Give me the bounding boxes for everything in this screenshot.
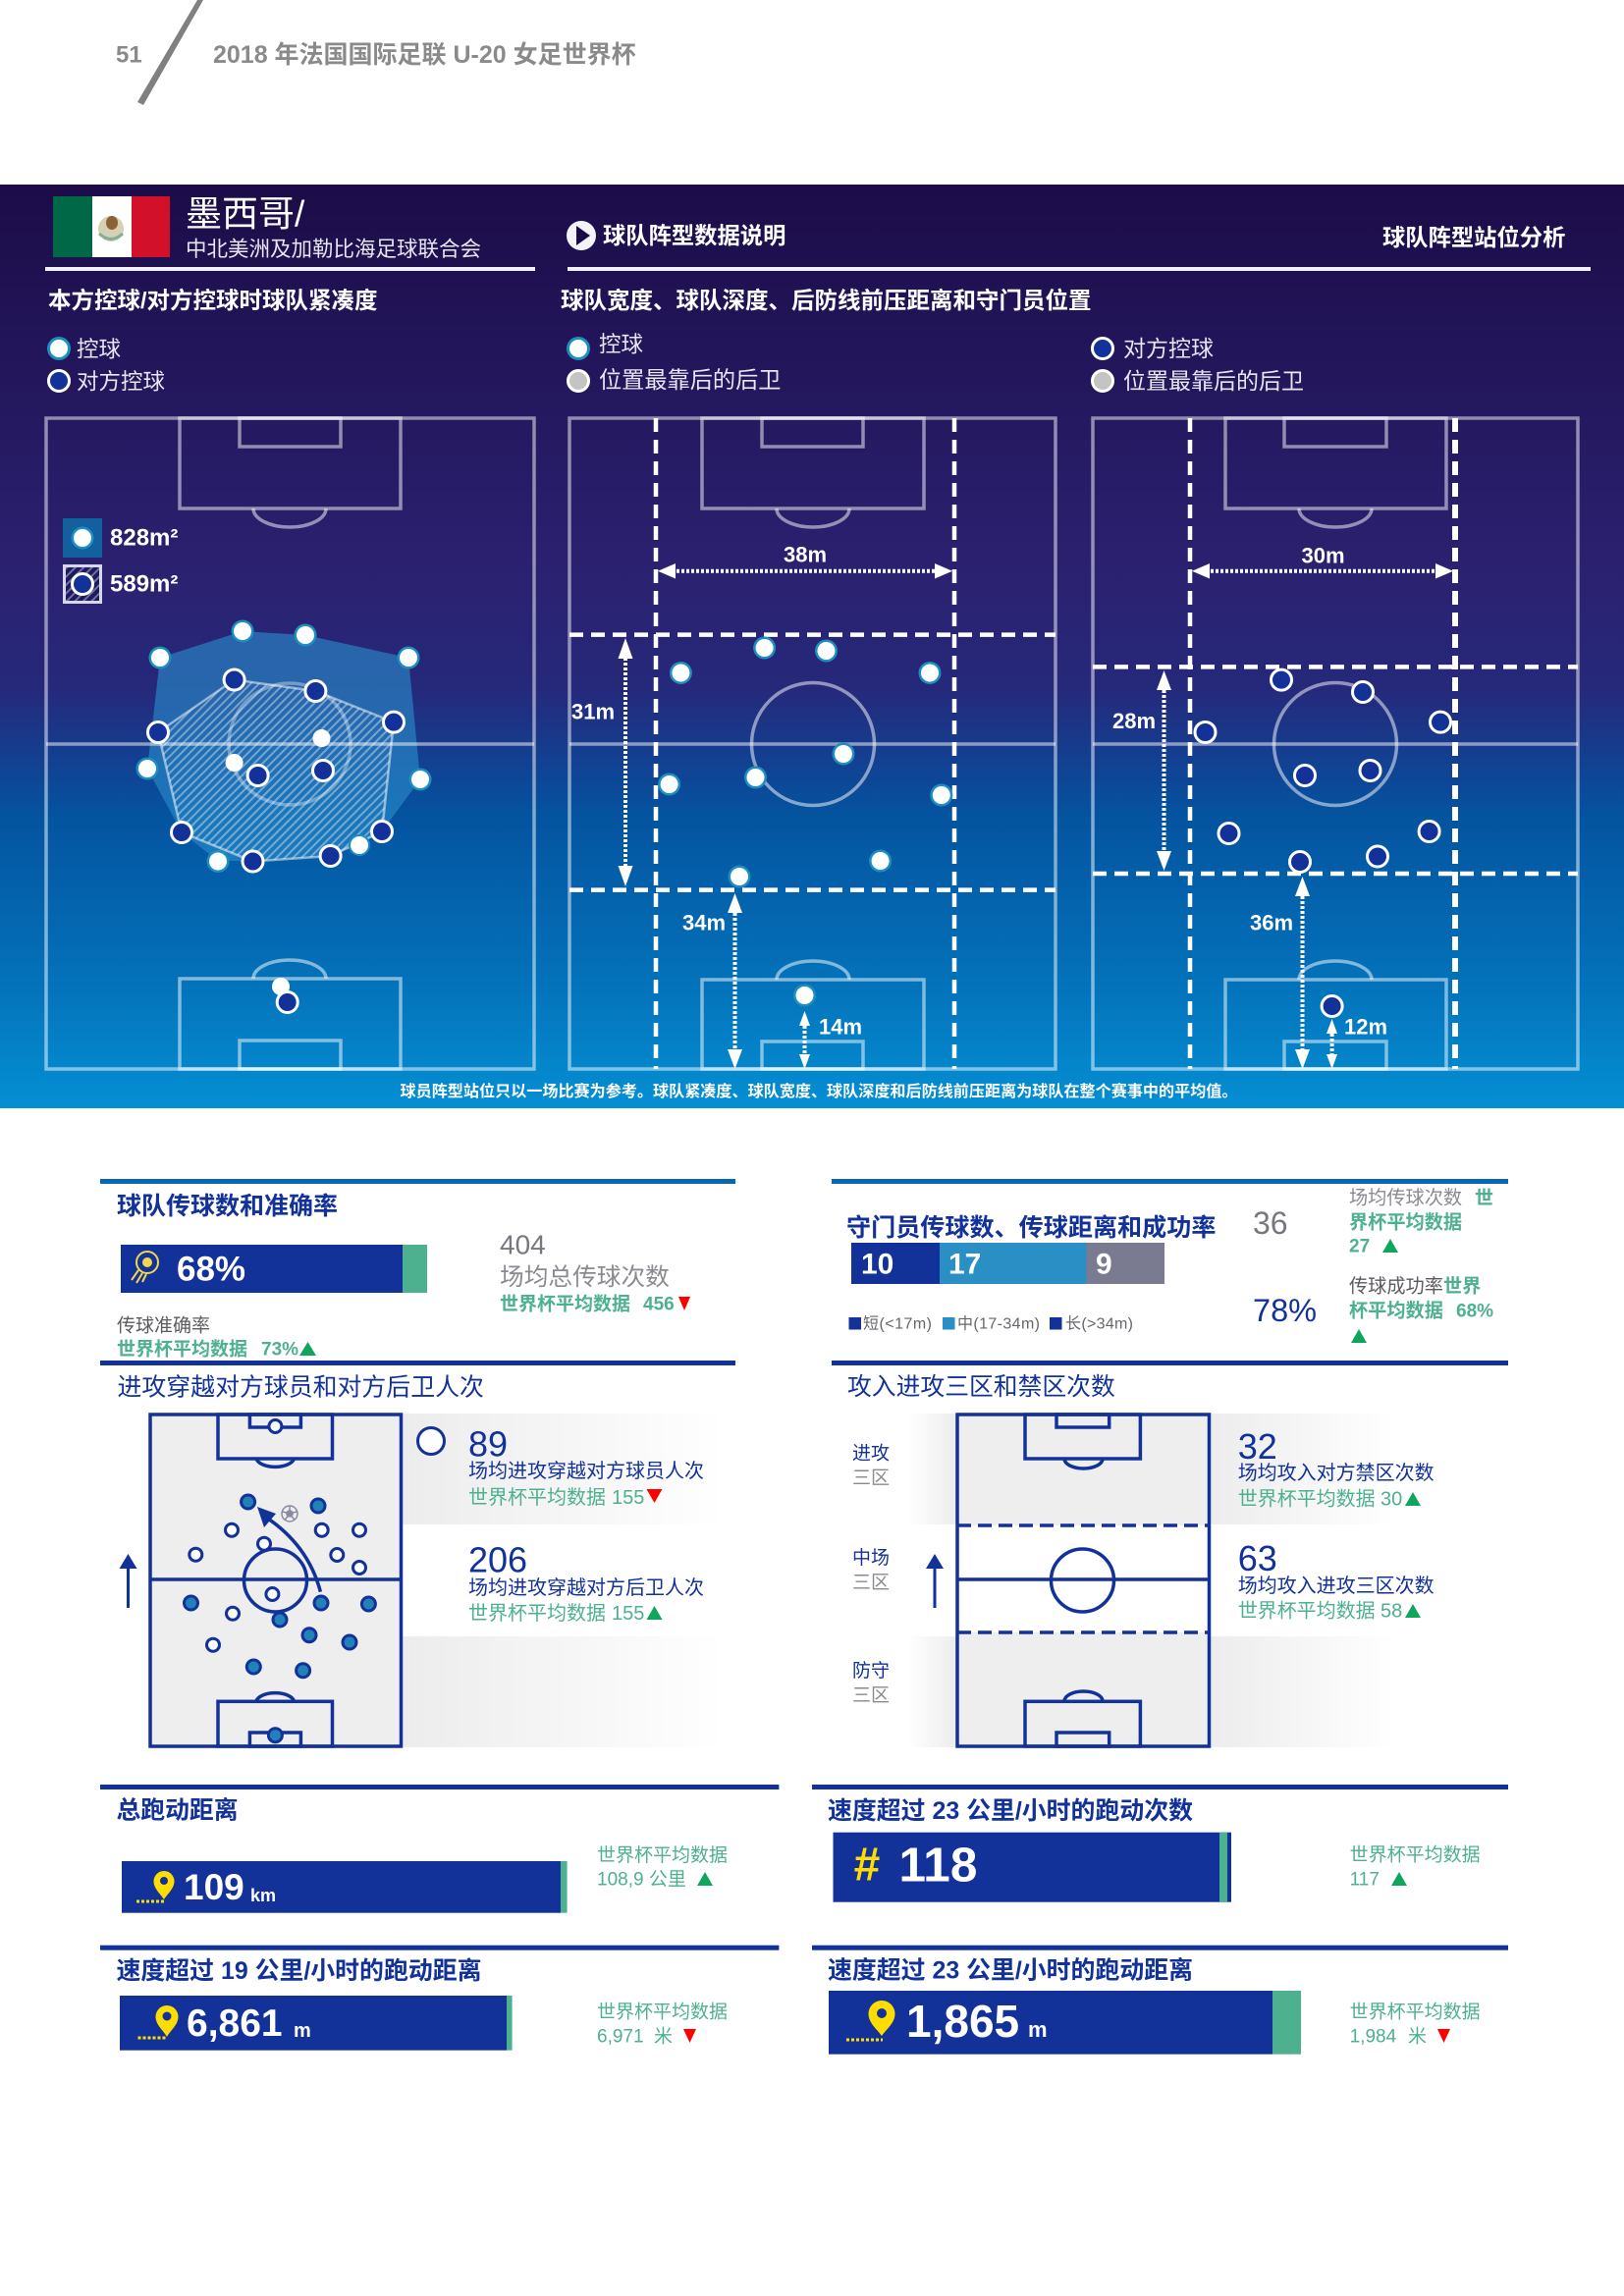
dashed limits bbox=[569, 418, 1056, 1069]
world cup average passes: 世界杯平均数据 bbox=[500, 1294, 630, 1315]
bar bbox=[829, 1991, 1301, 2055]
icon: Mexico flag bbox=[53, 196, 170, 257]
area legend: 589m² bbox=[110, 571, 178, 597]
panel: goalkeeper passes: 场均传球次数 bbox=[1349, 1188, 1462, 1209]
stat: players passed: 155 bbox=[612, 1487, 644, 1509]
world cup average: 米 bbox=[1408, 2026, 1427, 2048]
heading: 总跑动距离 bbox=[116, 1796, 238, 1824]
legend: out of possession: 位置最靠后的后卫 bbox=[1123, 368, 1304, 394]
area legend bbox=[63, 518, 178, 603]
world cup average bbox=[597, 1844, 728, 1891]
bar bbox=[120, 1996, 513, 2051]
icon: location pin bbox=[136, 1871, 175, 1901]
arrow: depth 31m bbox=[571, 638, 632, 886]
stat: final third entries: 世界杯平均数据 bbox=[1238, 1600, 1376, 1623]
defending team players bbox=[189, 1419, 365, 1651]
stacked bar bbox=[851, 1243, 1164, 1284]
panel: attacking line breaks bbox=[118, 1374, 725, 1747]
world cup average: 世界杯平均数据 bbox=[597, 1844, 728, 1866]
pitch bbox=[150, 1415, 401, 1746]
pitch lines bbox=[1093, 418, 1578, 1069]
heading: 进攻穿越对方球员和对方后卫人次 bbox=[118, 1374, 484, 1402]
arrow: goalkeeper 12m bbox=[1326, 1015, 1387, 1069]
panel: goalkeeper passes bbox=[832, 1179, 1508, 1343]
heading: formation analysis: 球队阵型站位分析 bbox=[1382, 224, 1565, 250]
pitch lines bbox=[569, 418, 1056, 1069]
stat: players passed bbox=[468, 1423, 704, 1509]
panel: team formation background bbox=[0, 185, 1624, 1108]
heading: formation data: 球队阵型数据说明 bbox=[603, 223, 785, 248]
arrow: defensive line 34m bbox=[682, 893, 742, 1069]
panel: goalkeeper passes: 传球成功率 bbox=[1349, 1276, 1443, 1298]
area legend: 828m² bbox=[110, 524, 178, 552]
page number: 51 bbox=[116, 41, 142, 69]
page title: 2018 年法国国际足联 U-20 女足世界杯 bbox=[213, 41, 636, 69]
arrow: width 38m bbox=[658, 542, 952, 579]
arrow: pass path bbox=[257, 1507, 320, 1592]
zone labels bbox=[852, 1443, 890, 1706]
value bbox=[854, 1838, 977, 1893]
bar bbox=[122, 1861, 568, 1913]
stat: players passed: 场均进攻穿越对方球员人次 bbox=[468, 1460, 704, 1482]
heading: 守门员传球数、传球距离和成功率 bbox=[846, 1214, 1216, 1242]
stat: defenders passed: 155 bbox=[612, 1603, 644, 1625]
legend: out of possession: 对方控球 bbox=[1123, 336, 1214, 361]
icon: play bbox=[567, 221, 596, 250]
panel: goalkeeper passes: 27 bbox=[1349, 1237, 1370, 1256]
legend: compactness bbox=[47, 337, 165, 395]
stat: final third entries bbox=[1238, 1538, 1435, 1623]
stat: players passed: 89 bbox=[468, 1423, 508, 1465]
stat: final third entries: 场均攻入进攻三区次数 bbox=[1238, 1575, 1435, 1597]
pitch bbox=[957, 1415, 1210, 1746]
players out of possession bbox=[147, 669, 405, 1013]
stat: box entries: 32 bbox=[1238, 1426, 1277, 1467]
panel: distance above 23 km/h bbox=[812, 1946, 1508, 2055]
panel: team passes and accuracy bbox=[100, 1179, 735, 1361]
passes per game: 36 bbox=[1253, 1205, 1288, 1241]
world cup average bbox=[597, 2001, 728, 2048]
zone labels: 进攻 bbox=[852, 1443, 890, 1465]
stat: defenders passed: 世界杯平均数据 bbox=[468, 1602, 606, 1625]
background bands bbox=[401, 1414, 725, 1747]
stat: box entries: 世界杯平均数据 bbox=[1238, 1488, 1376, 1511]
attacking team players bbox=[185, 1495, 375, 1742]
legend: compactness: 控球 bbox=[77, 338, 121, 361]
players bbox=[658, 636, 952, 1007]
world cup average: 117 bbox=[1350, 1869, 1380, 1891]
world cup average passes: 456 bbox=[643, 1294, 675, 1315]
arrow: attack direction bbox=[926, 1554, 944, 1608]
world cup average: 米 bbox=[654, 2026, 673, 2048]
legend: in possession bbox=[567, 332, 782, 393]
header rule left bbox=[45, 267, 535, 271]
pitch lines bbox=[46, 418, 534, 1069]
value bbox=[184, 1867, 276, 1907]
stat: final third entries: 63 bbox=[1238, 1538, 1277, 1578]
stat: box entries bbox=[1238, 1426, 1435, 1511]
arrow: defensive line 34m: 34m bbox=[682, 911, 726, 934]
value: m bbox=[1028, 2017, 1048, 2042]
distance legend: 短(<17m) bbox=[863, 1315, 932, 1333]
header rule right bbox=[568, 267, 1591, 271]
background bands bbox=[908, 1414, 1395, 1747]
footnote: 球员阵型站位只以一场比赛为参考。球队紧凑度、球队宽度、球队深度和后防线前压距离为球队在整个赛事中的平均值。 bbox=[401, 1082, 1237, 1100]
compactness area polygon out of possession bbox=[158, 679, 394, 862]
compactness area polygon in possession bbox=[147, 631, 420, 861]
stacked bar: 9 bbox=[1096, 1249, 1112, 1280]
world cup average bbox=[1350, 1843, 1481, 1891]
bar bbox=[833, 1833, 1231, 1902]
arrow: depth 28m bbox=[1112, 670, 1171, 871]
stacked bar: 17 bbox=[948, 1249, 981, 1280]
icon: location pin bbox=[137, 2005, 179, 2038]
icon: location pin bbox=[846, 2001, 895, 2040]
value: 118 bbox=[899, 1838, 977, 1893]
arrow: goalkeeper 14m: 14m bbox=[819, 1015, 862, 1039]
panel: total distance bbox=[100, 1785, 779, 1913]
players bbox=[1195, 669, 1451, 1017]
value: m bbox=[294, 2020, 311, 2042]
arrow: depth 28m: 28m bbox=[1112, 709, 1156, 733]
value: 109 bbox=[184, 1867, 244, 1907]
legend: out of possession bbox=[1092, 336, 1304, 394]
world cup average: 6,971 bbox=[597, 2026, 644, 2048]
heading: 速度超过 19 公里/小时的跑动距离 bbox=[116, 1957, 482, 1985]
header slash bbox=[137, 0, 203, 105]
world cup average: 世界杯平均数据 bbox=[1350, 1843, 1481, 1865]
panel: goalkeeper passes: 68% bbox=[1456, 1302, 1493, 1321]
icon: ball bbox=[132, 1252, 158, 1283]
total passes: 404 bbox=[500, 1229, 546, 1260]
zone labels: 中场 bbox=[852, 1547, 890, 1569]
world cup average passes bbox=[500, 1294, 690, 1315]
stacked bar: 10 bbox=[861, 1249, 893, 1280]
heading: 球队传球数和准确率 bbox=[117, 1193, 338, 1220]
value: 68% bbox=[177, 1251, 245, 1288]
icon: ball bbox=[282, 1506, 298, 1522]
zone labels: 三区 bbox=[852, 1468, 890, 1488]
zone labels: 三区 bbox=[852, 1685, 890, 1706]
arrow: attack direction bbox=[120, 1554, 137, 1608]
panel: goalkeeper passes: 世 bbox=[1475, 1188, 1493, 1209]
world cup average: 世界杯平均数据 bbox=[1350, 2001, 1481, 2022]
accuracy bar bbox=[121, 1245, 427, 1293]
panel: goalkeeper passes: 界杯平均数据 bbox=[1349, 1211, 1462, 1233]
distance legend: 长(>34m) bbox=[1065, 1315, 1133, 1333]
panel: final third and box entries bbox=[847, 1373, 1435, 1747]
arrow: goalkeeper 14m bbox=[799, 1011, 862, 1069]
stat: box entries: 场均攻入对方禁区次数 bbox=[1238, 1462, 1435, 1484]
legend: in possession: 位置最靠后的后卫 bbox=[599, 367, 782, 393]
dashed limits bbox=[1093, 418, 1578, 1069]
panel: team passes and accuracy: 场均总传球次数 bbox=[500, 1263, 670, 1291]
arrow: width 38m: 38m bbox=[784, 542, 827, 567]
icon: hollow circle bbox=[418, 1427, 444, 1455]
panel: compactness pitch bbox=[46, 418, 534, 1069]
world cup average: 1,984 bbox=[1350, 2026, 1397, 2048]
world cup average accuracy: 73% bbox=[261, 1339, 298, 1361]
value: 6,861 bbox=[187, 2002, 283, 2045]
heading: 速度超过 23 公里/小时的跑动次数 bbox=[828, 1797, 1193, 1825]
confederation name: 中北美洲及加勒比海足球联合会 bbox=[186, 238, 481, 261]
panel: goalkeeper passes: 世界 bbox=[1443, 1276, 1481, 1298]
arrow: depth 31m: 31m bbox=[571, 699, 615, 724]
distance legend: 中(17-34m) bbox=[957, 1315, 1040, 1333]
heading: 攻入进攻三区和禁区次数 bbox=[847, 1373, 1115, 1401]
legend: compactness: 对方控球 bbox=[77, 369, 165, 395]
heading: width depth: 球队宽度、球队深度、后防线前压距离和守门员位置 bbox=[561, 287, 1092, 313]
zone labels: 防守 bbox=[852, 1660, 890, 1682]
panel: out-of-possession width and depth pitch bbox=[1093, 418, 1578, 1069]
world cup average: 108,9 公里 bbox=[597, 1869, 686, 1891]
value: km bbox=[250, 1886, 276, 1905]
stat: box entries: 30 bbox=[1380, 1489, 1402, 1511]
players in possession bbox=[135, 620, 432, 995]
world cup average accuracy: 世界杯平均数据 bbox=[117, 1339, 247, 1361]
arrow: goalkeeper 12m: 12m bbox=[1344, 1015, 1387, 1039]
panel: runs above 23 km/h bbox=[812, 1785, 1508, 1902]
heading: compactness: 本方控球/对方控球时球队紧凑度 bbox=[48, 287, 378, 313]
heading: 速度超过 23 公里/小时的跑动距离 bbox=[828, 1957, 1193, 1985]
panel: goalkeeper passes: 杯平均数据 bbox=[1349, 1300, 1443, 1321]
pass success rate: 78% bbox=[1253, 1293, 1317, 1328]
arrow: defensive line 36m: 36m bbox=[1250, 911, 1293, 934]
stat: defenders passed: 206 bbox=[468, 1539, 527, 1580]
value: # bbox=[854, 1840, 880, 1891]
arrow: width 30m: 30m bbox=[1302, 544, 1345, 567]
value: 1,865 bbox=[906, 1996, 1019, 2047]
stat: defenders passed bbox=[468, 1539, 704, 1625]
zone labels: 三区 bbox=[852, 1573, 890, 1593]
stat: defenders passed: 场均进攻穿越对方后卫人次 bbox=[468, 1576, 704, 1599]
world cup average: 世界杯平均数据 bbox=[597, 2001, 728, 2022]
pass accuracy label: 传球准确率 bbox=[117, 1315, 210, 1337]
arrow: defensive line 36m bbox=[1250, 877, 1310, 1069]
arrow: width 30m bbox=[1192, 544, 1453, 579]
panel: in-possession width and depth pitch bbox=[569, 418, 1056, 1069]
legend: in possession: 控球 bbox=[599, 332, 643, 357]
distance legend bbox=[848, 1315, 1133, 1333]
stat: final third entries: 58 bbox=[1380, 1601, 1402, 1623]
stat: players passed: 世界杯平均数据 bbox=[468, 1486, 606, 1509]
world cup average accuracy bbox=[117, 1339, 316, 1361]
world cup average bbox=[1350, 2001, 1481, 2048]
team name: 墨西哥/ bbox=[186, 194, 305, 234]
panel: distance above 19 km/h bbox=[100, 1946, 779, 2051]
